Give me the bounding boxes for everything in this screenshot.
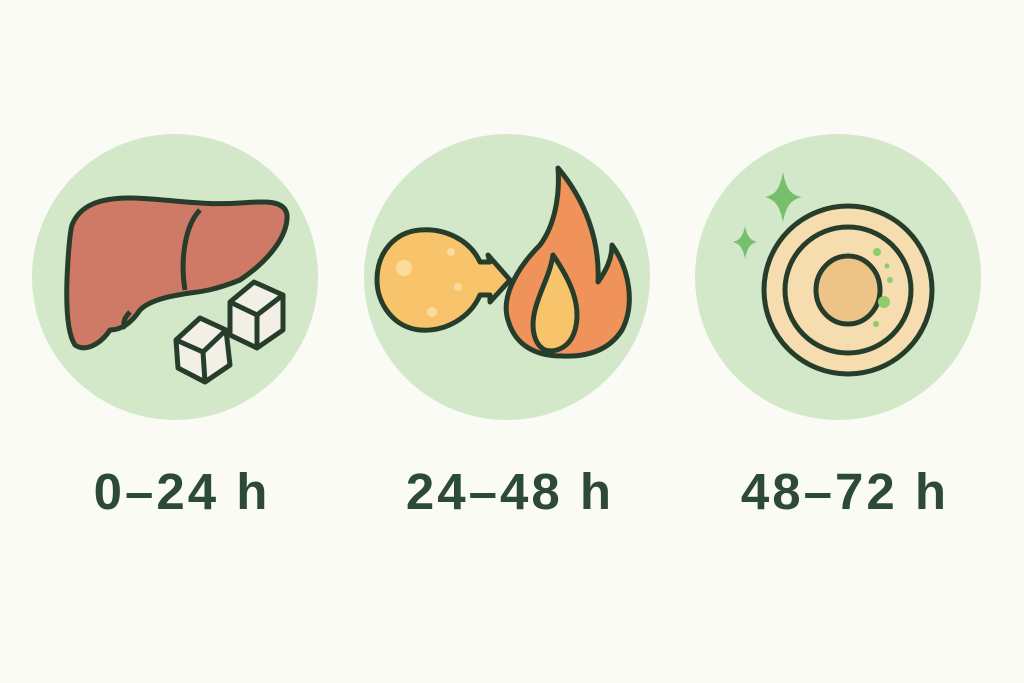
icon: liver — [67, 198, 287, 348]
label: 24-48 h: 24–48 h — [406, 463, 614, 520]
icon: sugar cubes — [176, 282, 283, 382]
icon: flame — [506, 168, 629, 356]
label: 0-24 h: 0–24 h — [94, 463, 270, 520]
label: 48-72 h: 48–72 h — [741, 463, 949, 520]
icon: target cell — [764, 206, 932, 374]
icon: sparkles — [733, 172, 802, 259]
panel: 0-24 h — [32, 134, 318, 420]
circle background 2 — [364, 134, 650, 420]
icon: fat droplet with arrow — [377, 230, 510, 330]
panel: 24-48 h — [364, 134, 650, 420]
panel: 48-72 h — [695, 134, 981, 420]
circle background 1 — [32, 134, 318, 420]
circle background 3 — [695, 134, 981, 420]
